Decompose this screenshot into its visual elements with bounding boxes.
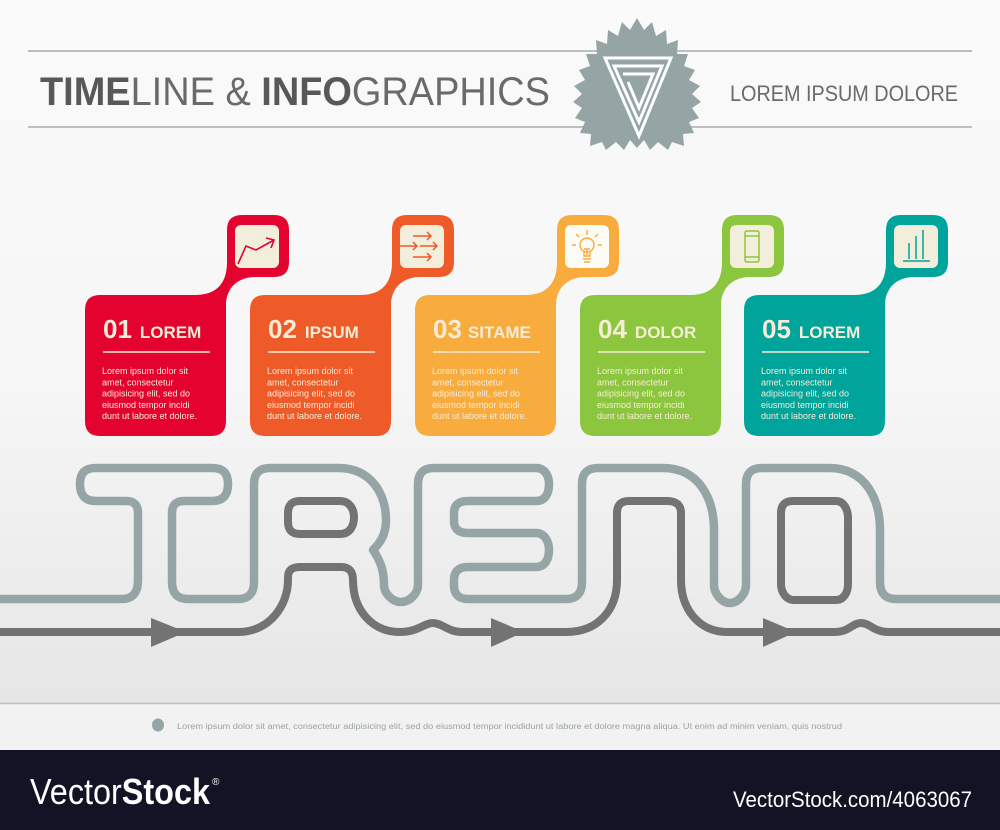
dark flow path	[0, 501, 1000, 632]
watermark band: VectorStock	[30, 771, 211, 812]
text 02: eiusmod tempor incidi	[267, 400, 355, 410]
text 03: Lorem ipsum dolor sit	[432, 366, 519, 376]
heading 04: 04 DOLOR	[598, 314, 696, 344]
text 03: adipisicing elit, sed do	[432, 389, 520, 399]
card 02	[250, 215, 454, 436]
logo badge	[573, 18, 701, 150]
icon: bar chart	[894, 225, 938, 268]
text 01: amet, consectetur	[102, 377, 174, 387]
watermark band: VectorStock.com/4063067	[733, 787, 972, 812]
watermark band: ®	[212, 777, 220, 788]
text 01: dunt ut labore et dolore.	[102, 411, 197, 421]
TREND line lettering	[0, 468, 1000, 632]
text 04: Lorem ipsum dolor sit	[597, 366, 684, 376]
watermark band	[0, 750, 1000, 830]
icon: light bulb	[565, 225, 609, 268]
text 05: amet, consectetur	[761, 377, 833, 387]
footer note	[152, 718, 842, 732]
text 02: dunt ut labore et dolore.	[267, 411, 362, 421]
dark D loop	[781, 501, 848, 600]
text 05: Lorem ipsum dolor sit	[761, 366, 848, 376]
text 04: dunt ut labore et dolore.	[597, 411, 692, 421]
icon: trend arrow	[235, 225, 279, 268]
heading 03: 03 SITAME	[433, 314, 531, 344]
text 02: amet, consectetur	[267, 377, 339, 387]
text 01: Lorem ipsum dolor sit	[102, 366, 189, 376]
arrow 2	[491, 618, 524, 647]
text 01: adipisicing elit, sed do	[102, 389, 190, 399]
arrow 1	[151, 618, 186, 647]
text 02: adipisicing elit, sed do	[267, 389, 355, 399]
text 05: eiusmod tempor incidi	[761, 400, 849, 410]
text 04: eiusmod tempor incidi	[597, 400, 685, 410]
logo V mark	[605, 58, 671, 136]
dark R bowl loop	[288, 501, 354, 534]
subtitle: LOREM IPSUM DOLORE	[730, 81, 958, 106]
text 05: adipisicing elit, sed do	[761, 389, 849, 399]
card 01	[85, 215, 289, 436]
heading 02: 02 IPSUM	[268, 314, 359, 344]
card 05	[744, 215, 948, 436]
text 03: amet, consectetur	[432, 377, 504, 387]
heading 05: 05 LOREM	[762, 314, 860, 344]
icon: phone	[730, 225, 774, 268]
text 03: dunt ut labore et dolore.	[432, 411, 527, 421]
text 03: eiusmod tempor incidi	[432, 400, 520, 410]
card 04	[580, 215, 784, 436]
text 04: amet, consectetur	[597, 377, 669, 387]
footer note: Lorem ipsum dolor sit amet, consectetur adipisicing elit, sed do eiusmod tempor incididunt ut labore et dolore magna aliqua. Ut enim ad minim veniam, quis nostrud	[177, 722, 842, 731]
text 01: eiusmod tempor incidi	[102, 400, 190, 410]
title: TIMELINE & INFOGRAPHICS	[40, 70, 550, 114]
card 03	[415, 215, 619, 436]
heading 01: 01 LOREM	[103, 314, 201, 344]
arrow 3	[763, 618, 796, 647]
icon: arrows	[400, 225, 444, 268]
light outline path	[0, 468, 1000, 603]
text 02: Lorem ipsum dolor sit	[267, 366, 354, 376]
text 05: dunt ut labore et dolore.	[761, 411, 856, 421]
text 04: adipisicing elit, sed do	[597, 389, 685, 399]
